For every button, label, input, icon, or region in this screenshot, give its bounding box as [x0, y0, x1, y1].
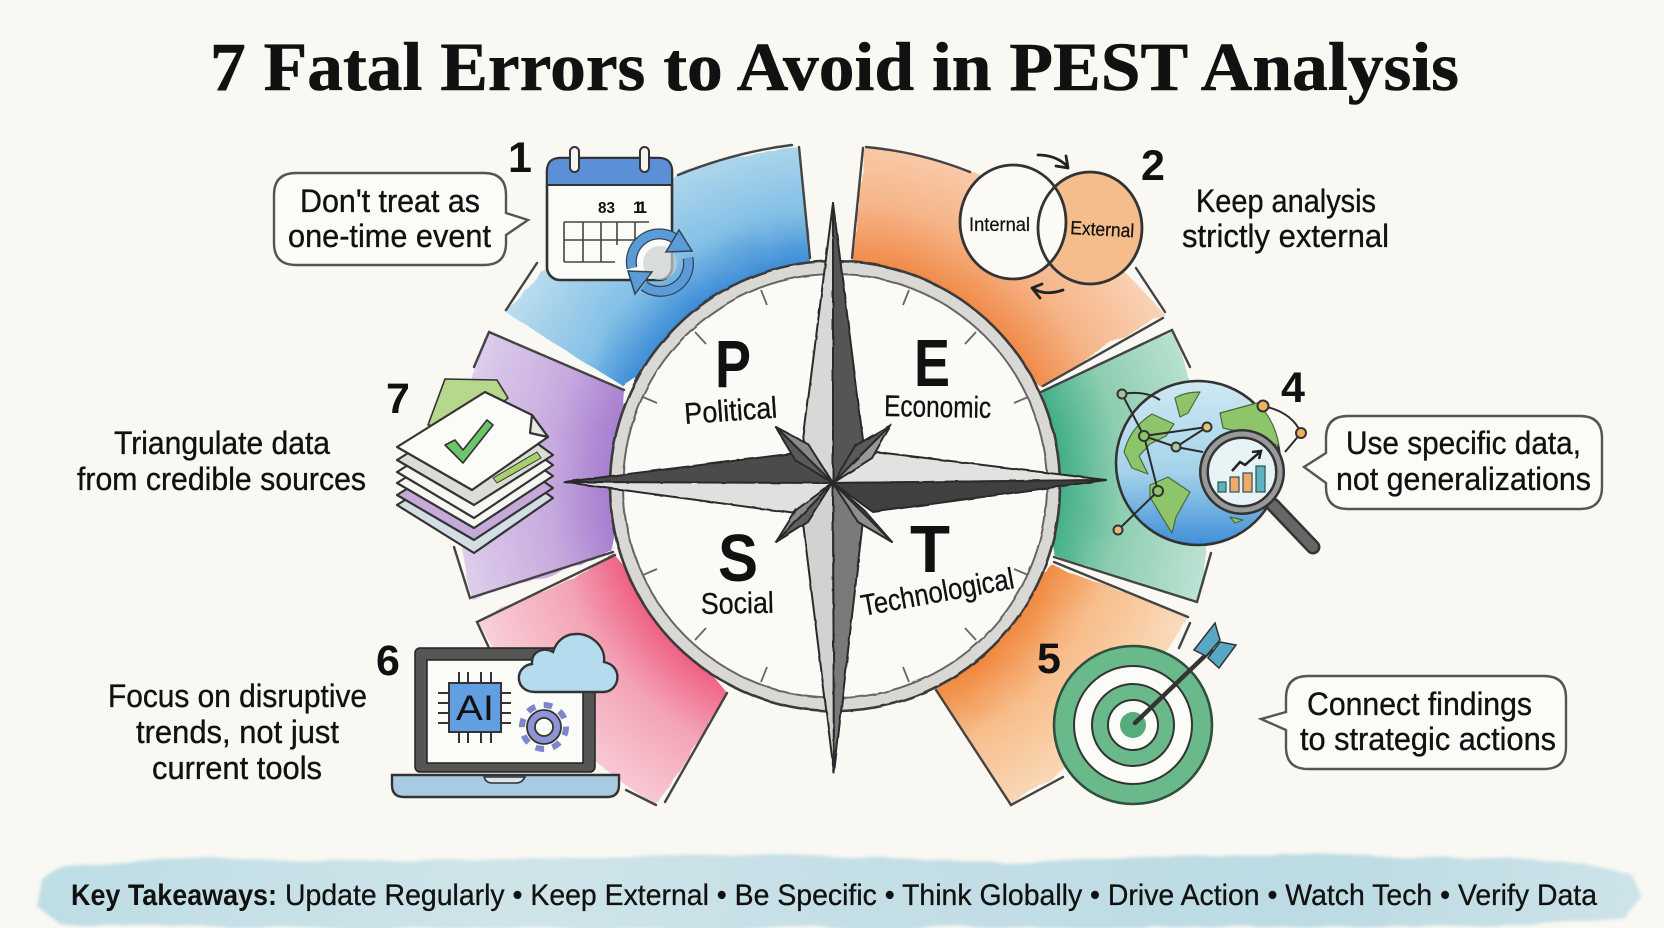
number 1: 1	[508, 134, 532, 182]
number 2: 2	[1141, 142, 1165, 190]
letter T and Technological label: Technological	[858, 562, 1017, 623]
icon: laptop with AI chip, gear and cloud: AI	[456, 689, 494, 728]
panel: pink sector 6	[477, 555, 727, 805]
text: error 6: trends, not just	[136, 714, 339, 750]
text: error 2: Keep analysis	[1196, 183, 1376, 219]
icon: calendar with sync arrows: 11	[633, 198, 647, 217]
letter P and Political label	[683, 327, 778, 431]
panel: green sector 4	[1041, 330, 1211, 602]
callout: error 4: not generalizations	[1336, 461, 1591, 497]
callout: error 1: one-time event	[288, 218, 491, 254]
text: error 7: from credible sources	[77, 461, 366, 497]
letter S and Social label: S	[718, 521, 758, 596]
letter S and Social label	[701, 521, 774, 621]
letter E and Economic label: E	[914, 326, 950, 401]
icon: internal external venn diagram	[960, 155, 1142, 298]
icon: calendar with sync arrows	[547, 147, 692, 294]
icon: internal external venn diagram: Internal	[969, 215, 1030, 236]
icon: calendar with sync arrows: 83	[598, 200, 615, 217]
compass dial	[610, 261, 1060, 711]
banner: key takeaways: Key Takeaways:	[71, 879, 277, 912]
callout: error 1	[274, 173, 528, 265]
panel: orange sector 2	[852, 147, 1165, 387]
text: error 6: Focus on disruptive	[108, 678, 367, 714]
callout: error 1: Don't treat as	[300, 183, 480, 219]
callout: error 5	[1261, 676, 1566, 769]
compass star	[564, 203, 1106, 773]
letter T and Technological label: T	[910, 512, 950, 587]
letter P and Political label: Political	[683, 392, 778, 431]
text: error 2: strictly external	[1182, 218, 1389, 254]
letter E and Economic label: Economic	[884, 390, 991, 425]
title: 7 Fatal Errors to Avoid in PEST Analysis	[210, 29, 1459, 105]
callout: error 5: to strategic actions	[1300, 721, 1556, 757]
text: error 7: Triangulate data	[114, 425, 330, 461]
banner: key takeaways	[36, 853, 1640, 928]
number 6: 6	[376, 637, 400, 685]
panel: orange sector 5	[936, 562, 1190, 805]
text: error 6	[108, 678, 367, 786]
callout: error 4	[1304, 416, 1602, 509]
letter P and Political label: P	[715, 327, 751, 402]
callout: error 5: Connect findings	[1307, 686, 1532, 722]
callout: error 4: Use specific data,	[1346, 425, 1581, 461]
icon: target with arrow	[1054, 623, 1236, 804]
letter E and Economic label	[884, 326, 991, 425]
letter S and Social label: Social	[701, 587, 774, 621]
banner: key takeaways: Update Regularly • Keep External • Be Specific • Think Globally • Drive Action • Watch Tech • Verify Data	[285, 879, 1597, 912]
number 5: 5	[1037, 635, 1061, 683]
text: error 2	[1182, 183, 1389, 254]
text: error 7	[77, 425, 366, 497]
icon: internal external venn diagram: External	[1070, 218, 1135, 242]
number 4: 4	[1281, 364, 1305, 412]
icon: laptop with AI chip, gear and cloud	[392, 634, 619, 797]
icon: globe with magnifying glass	[1114, 381, 1313, 547]
text: error 6: current tools	[152, 750, 322, 786]
number 7: 7	[386, 375, 410, 423]
panel: blue sector 1	[505, 145, 810, 387]
panel: purple sector 7	[454, 332, 624, 600]
icon: stack of verified documents	[397, 379, 553, 553]
letter T and Technological label	[858, 512, 1017, 623]
